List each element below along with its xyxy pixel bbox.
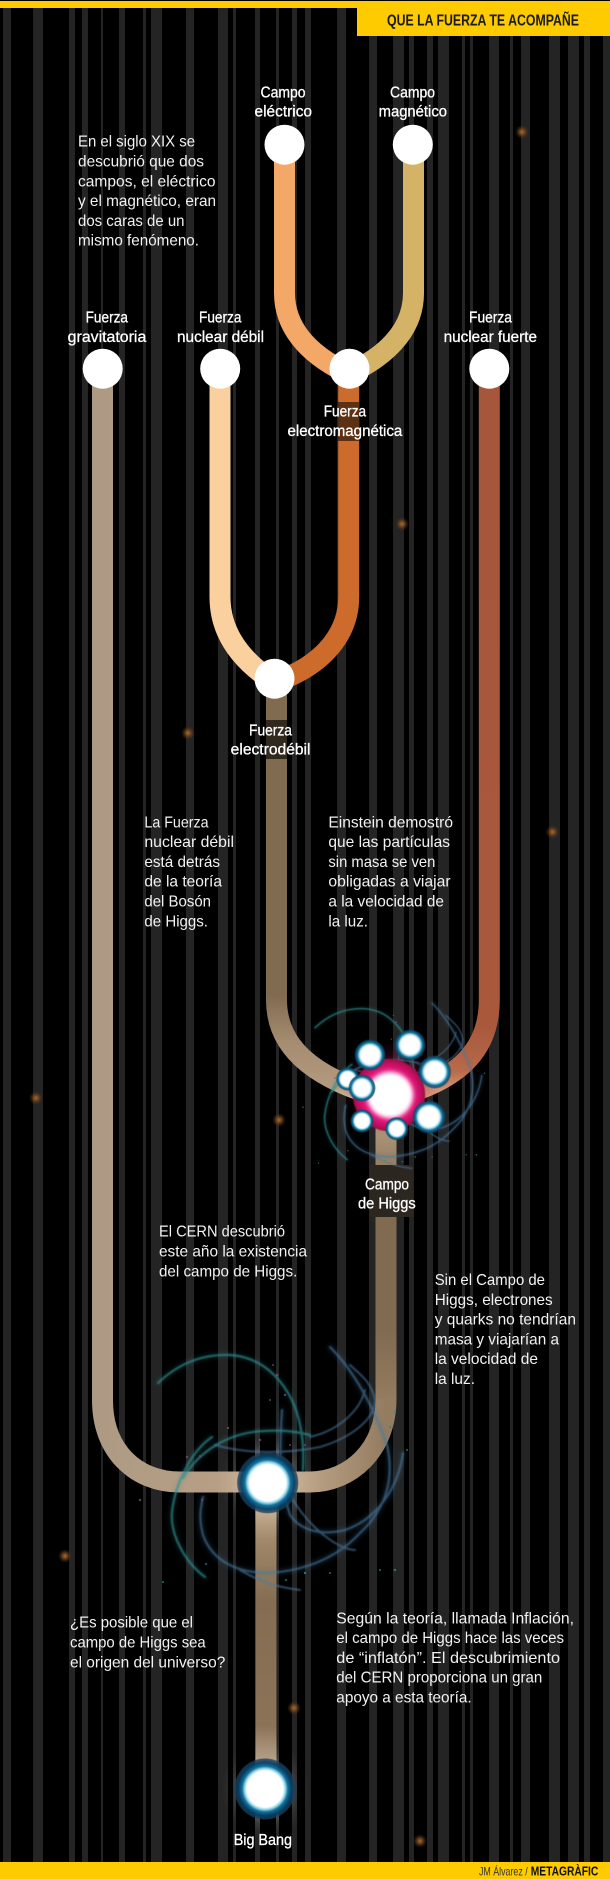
text: fuerza nuclear débil y Higgs: nuclear débil: [144, 834, 234, 851]
label: campo magnético: magnético: [379, 104, 447, 121]
label: fuerza gravitatoria: Fuerza: [86, 310, 128, 327]
text: CERN: El CERN descubrió: [159, 1224, 285, 1241]
glow: Campo de Higgs: [336, 1029, 452, 1141]
label: fuerza electrodébil: [231, 722, 310, 759]
node: fuerza electromagnética: [330, 349, 370, 389]
tube: fuerza electromagnética: [275, 369, 349, 682]
tube: campo de Higgs curve: [268, 1399, 386, 1482]
footer bar with credits: [0, 1862, 610, 1879]
node: fuerza gravitatoria: [83, 349, 123, 389]
label: fuerza electromagnética: [288, 404, 403, 440]
label: fuerza nuclear débil: [177, 310, 264, 346]
tube: campo magnético: [352, 145, 414, 372]
text: sin el campo de Higgs: la velocidad de: [435, 1351, 538, 1368]
text: fuerza nuclear débil y Higgs: está detrás: [144, 854, 220, 871]
label: campo de Higgs: de Higgs: [358, 1195, 416, 1212]
halo on stripes: Big Bang: [221, 1737, 309, 1841]
node: fuerza nuclear fuerte: [469, 349, 509, 389]
label: campo magnético: [379, 84, 447, 121]
text: inflación: del CERN proporciona un gran: [336, 1670, 542, 1687]
text: inflación: apoyo a esta teoría.: [336, 1690, 472, 1706]
distant orange stars: [29, 125, 560, 1848]
header: title box: [357, 8, 610, 36]
text: sin el campo de Higgs: Higgs, electrones: [435, 1292, 553, 1309]
text: siglo XIX: mismo fenómeno.: [78, 233, 199, 250]
glow: node at gravity and Higgs junction: [237, 1452, 299, 1514]
text: sin el campo de Higgs: y quarks no tendrían: [435, 1312, 576, 1329]
label: fuerza electrodébil: electrodébil: [231, 742, 310, 759]
text: siglo XIX: campos, el eléctrico: [78, 173, 216, 190]
node: fuerza electrodébil: [254, 659, 294, 699]
label: fuerza electromagnética: electromagnética: [288, 423, 403, 440]
text: sin el campo de Higgs: Sin el Campo de: [435, 1272, 545, 1289]
label: fuerza nuclear débil: Fuerza: [199, 310, 242, 327]
text: origen del universo: [70, 1615, 225, 1671]
label: campo de Higgs: [358, 1176, 416, 1212]
text: fuerza nuclear débil y Higgs: de Higgs.: [144, 913, 208, 930]
label: fuerza electrodébil: Fuerza: [249, 722, 292, 739]
text: siglo XIX: [78, 134, 216, 250]
text: sin el campo de Higgs: masa y viajarían a: [435, 1331, 559, 1348]
label: campo eléctrico: Campo: [260, 84, 306, 102]
text: origen del universo: campo de Higgs sea: [70, 1634, 206, 1652]
tube: campo de Higgs vertical: [376, 1095, 396, 1400]
label: fuerza nuclear fuerte: Fuerza: [469, 310, 512, 327]
text: sin el campo de Higgs: la luz.: [435, 1371, 475, 1388]
text: Einstein: a la velocidad de: [328, 894, 444, 910]
label: campo eléctrico: [254, 84, 312, 121]
label: fuerza nuclear fuerte: [444, 310, 537, 346]
tube: fuerza electrodébil: [276, 679, 385, 1098]
label: fuerza gravitatoria: [68, 310, 147, 346]
tube: fuerza nuclear fuerte: [390, 369, 489, 1098]
text: fuerza nuclear débil y Higgs: [144, 814, 234, 930]
footer bar with credits: JM Álvarez /: [479, 1863, 528, 1878]
text: inflación: el campo de Higgs hace las veces: [336, 1630, 564, 1647]
label background bands: [266, 402, 413, 1217]
label: fuerza nuclear débil: nuclear débil: [177, 329, 264, 346]
text: Einstein: obligadas a viajar: [328, 874, 451, 891]
label: campo eléctrico: eléctrico: [254, 104, 312, 121]
tube: hacia el Big Bang: [256, 1482, 276, 1790]
tube: fuerza gravitatoria: [102, 369, 268, 1482]
text: Einstein: Einstein demostró: [328, 814, 453, 831]
text: origen del universo: ¿Es posible que el: [70, 1615, 193, 1632]
text: CERN: este año la existencia: [159, 1244, 307, 1260]
label: campo magnético: Campo: [390, 84, 435, 102]
label: fuerza gravitatoria: gravitatoria: [68, 329, 147, 346]
swirl around big node: [139, 1347, 408, 1590]
tube: campo eléctrico: [284, 145, 345, 372]
text: CERN: del campo de Higgs.: [159, 1263, 297, 1280]
text: inflación: [336, 1610, 574, 1706]
tube: fuerza nuclear débil: [220, 369, 274, 682]
text: origen del universo: el origen del universo?: [70, 1654, 225, 1671]
text: Einstein: la luz.: [328, 913, 368, 930]
node: campo eléctrico: [264, 125, 304, 165]
node: fuerza nuclear débil: [200, 349, 240, 389]
top bar: [0, 1, 610, 8]
satellite particles: [336, 1029, 452, 1141]
label: fuerza nuclear fuerte: nuclear fuerte: [444, 329, 537, 346]
label: Big Bang: Big Bang: [234, 1832, 292, 1849]
text: siglo XIX: dos caras de un: [78, 213, 184, 230]
text: Einstein: sin masa se ven: [328, 854, 435, 871]
text: inflación: de “inflatón”. El descubrimiento: [336, 1650, 560, 1667]
text: fuerza nuclear débil y Higgs: de la teoría: [144, 874, 222, 891]
text: siglo XIX: y el magnético, eran: [78, 193, 216, 210]
text: Einstein: [328, 814, 453, 930]
text: Einstein: que las partículas: [328, 834, 450, 851]
text: fuerza nuclear débil y Higgs: La Fuerza: [144, 814, 209, 831]
text: fuerza nuclear débil y Higgs: del Bosón: [144, 894, 211, 910]
text: siglo XIX: En el siglo XIX se: [78, 134, 195, 151]
swirl around Higgs: [302, 1003, 485, 1168]
text: sin el campo de Higgs: [435, 1272, 576, 1388]
glow: Big Bang: [234, 1758, 296, 1820]
text: CERN: [159, 1224, 307, 1280]
halo on stripes: junction node: [220, 1426, 316, 1538]
node: campo magnético: [393, 125, 433, 165]
label: campo de Higgs: Campo: [365, 1176, 409, 1193]
label: fuerza electromagnética: Fuerza: [324, 404, 366, 421]
text: siglo XIX: descubrió que dos: [78, 154, 204, 170]
text: inflación: Según la teoría, llamada Inflación,: [336, 1610, 574, 1627]
